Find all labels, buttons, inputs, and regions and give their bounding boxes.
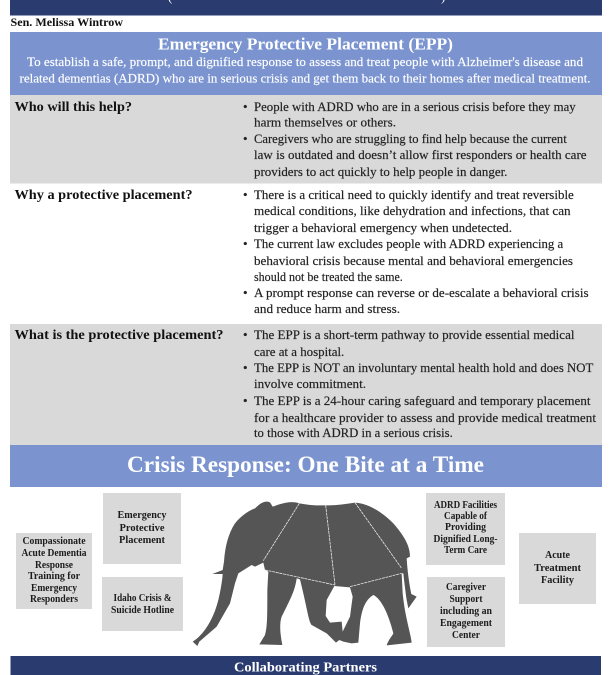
answer bullets: The EPP is NOT an involuntary mental health hold and does NOT [254,360,593,375]
box: acute treatment facility: Facility [541,575,575,586]
answer bullets: A prompt response can reverse or de-escalate a behavioral crisis [254,285,589,300]
box: dementia response training: Responders [30,594,78,605]
box: emergency protective placement: Emergency [118,510,167,521]
answer bullets: medical conditions, like dehydration and infections, that can [254,203,571,218]
EPP purpose statement [20,54,590,86]
answer bullets: The EPP is a 24-hour caring safeguard and temporary placement [254,393,591,408]
box: crisis hotline [102,577,183,631]
panel: crisis response heading [10,445,602,487]
answer bullets: for a healthcare provider to assess and provide medical treatment [254,410,596,425]
answer bullets: care at a hospital. [254,344,344,359]
answer bullets: • [243,131,248,146]
box: long-term care facilities: Capable of [444,511,487,522]
question heading: Why a protective placement? [14,188,192,203]
box: crisis hotline: Idaho Crisis & [114,593,172,604]
panel: what is the protective placement [10,324,602,445]
box: caregiver support: Support [450,594,483,605]
box: caregiver support: Engagement [440,618,492,629]
answer bullets: providers to act quickly to help people in danger. [254,164,507,179]
panel: why a protective placement [10,184,602,324]
answer bullets: • [243,393,248,408]
box: crisis hotline: Suicide Hotline [111,605,174,616]
answer bullets: The current law excludes people with ADRD experiencing a [254,236,563,251]
box: caregiver support: Caregiver [446,582,486,593]
panel: crisis response heading: Crisis Response: One Bite at a Time [127,452,484,478]
answer bullets [243,327,596,440]
EPP purpose statement: To establish a safe, prompt, and dignified response to assess and treat people with Alzheimer's disease and [27,54,584,69]
footer: collaborating partners: Collaborating Partners [234,660,377,674]
icon: elephant divided into bites [193,502,417,646]
answer bullets: harm themselves or others. [254,114,396,130]
EPP purpose statement: related dementias (ADRD) who are in serious crisis and get them back to their homes after medical treatment. [20,70,590,86]
panel: EPP purpose [10,32,602,95]
EPP heading: Emergency Protective Placement (EPP) [158,34,453,54]
panel: who will this help [10,95,602,184]
question heading: Who will this help? [14,100,132,115]
sponsor name: Sen. Melissa Wintrow [10,17,124,29]
top title band [10,0,602,16]
answer bullets: behavioral crisis because mental and behavioral emergencies [254,253,573,268]
box: emergency protective placement [103,493,181,564]
box: dementia response training: Training for [28,571,80,582]
answer bullets: People with ADRD who are in a serious crisis before they may [254,99,576,114]
box: caregiver support: Center [452,630,480,641]
box: dementia response training: Compassionate [22,536,86,547]
box: emergency protective placement: Protective [120,523,165,534]
box: caregiver support [427,577,505,647]
question heading: What is the protective placement? [14,328,224,343]
box: long-term care facilities: Term Care [444,545,487,556]
answer bullets: The EPP is a short-term pathway to provide essential medical [254,327,575,342]
box: long-term care facilities: ADRD Facilities [434,500,497,511]
answer bullets: • [243,99,248,114]
box: dementia response training: Response [35,560,73,571]
box: dementia response training: Emergency [31,583,78,594]
box: acute treatment facility: Treatment [534,563,582,574]
box: acute treatment facility [519,533,596,604]
answer bullets: to those with ADRD in a serious crisis. [254,425,453,440]
answer bullets: law is outdated and doesn’t allow first responders or health care [254,147,587,162]
box: long-term care facilities: Dignified Long- [434,534,498,545]
answer bullets: • [243,327,248,342]
box: caregiver support: including an [440,606,492,617]
answer bullets: Caregivers who are struggling to find help because the current [254,131,567,146]
answer bullets: • [243,285,248,300]
answer bullets: and reduce harm and stress. [254,301,400,316]
answer bullets [243,187,589,316]
answer bullets: • [243,360,248,375]
box: long-term care facilities [426,493,505,565]
answer bullets: There is a critical need to quickly identify and treat reversible [254,187,574,202]
footer: collaborating partners [10,656,601,675]
answer bullets: trigger a behavioral emergency when undetected. [254,220,512,235]
answer bullets: • [243,236,248,251]
box: long-term care facilities: Providing [445,522,487,533]
box: acute treatment facility: Acute [545,550,570,561]
answer bullets: • [243,187,248,202]
box: dementia response training: Acute Dementia [22,548,87,559]
answer bullets: involve commitment. [254,376,366,391]
answer bullets: should not be treated the same. [254,269,403,284]
box: emergency protective placement: Placement [119,535,166,546]
box: dementia response training [16,533,92,609]
answer bullets [243,99,587,179]
